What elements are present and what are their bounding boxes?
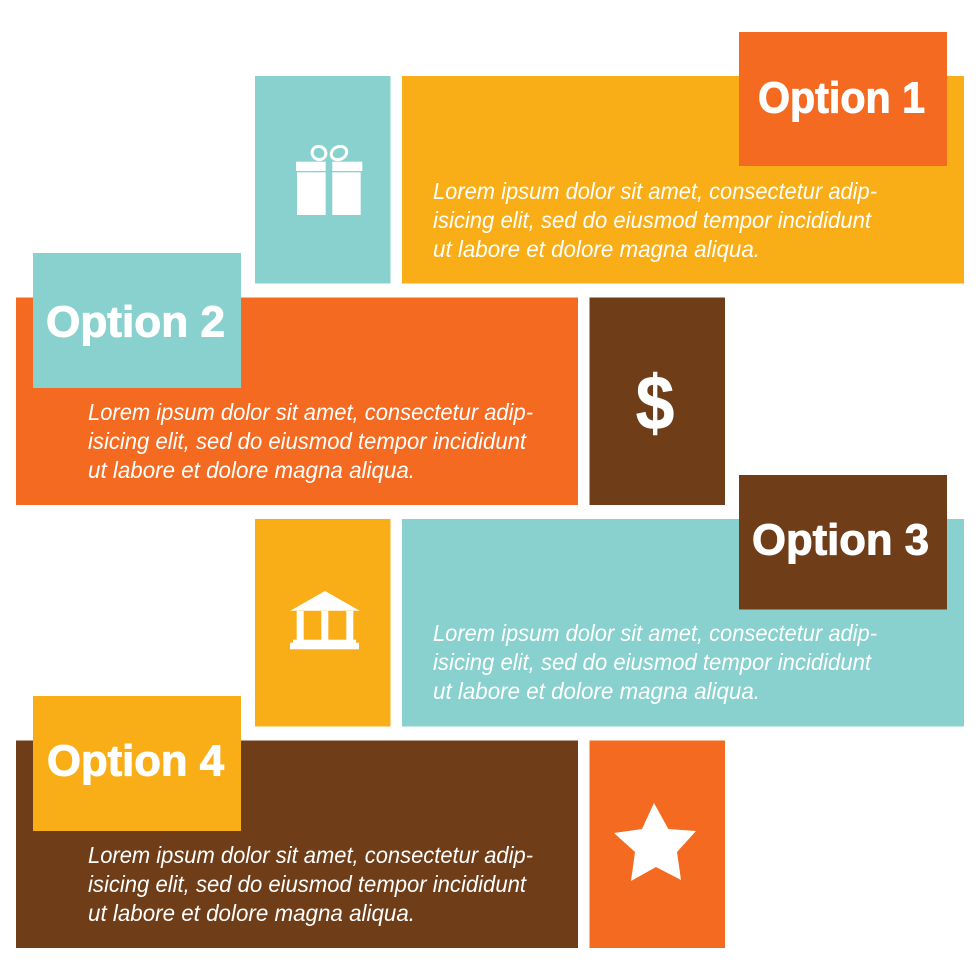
content bar: brown: [16, 740, 578, 948]
label box: Option 4: [33, 696, 241, 831]
icon: dollar sign: $: [636, 360, 674, 446]
icon: gift: [296, 144, 362, 215]
text block: option 4 description: isicing elit, sed do eiusmod tempor incididunt: [88, 871, 528, 897]
icon: star: [614, 803, 696, 881]
text block: option 2 description: isicing elit, sed do eiusmod tempor incididunt: [88, 428, 528, 454]
label box: Option 3: Option 3: [752, 516, 929, 564]
text block: option 2 description: ut labore et dolore magna aliqua.: [88, 457, 415, 483]
label box: Option 4: Option 4: [47, 736, 225, 786]
label box: Option 2: Option 2: [46, 298, 225, 346]
panel: option 2: [16, 253, 725, 505]
icon tile: brown: [590, 298, 725, 505]
text block: option 1 description: ut labore et dolore magna aliqua.: [433, 236, 760, 262]
panel: option 3: [255, 475, 964, 726]
text block: option 3 description: isicing elit, sed do eiusmod tempor incididunt: [433, 649, 873, 675]
label box: Option 2: [33, 253, 241, 388]
content bar: yellow: [402, 76, 964, 284]
content bar: teal: [402, 519, 964, 726]
text block: option 3 description: ut labore et dolore magna aliqua.: [433, 678, 760, 704]
icon tile: yellow: [255, 519, 390, 726]
label box: Option 1: [739, 32, 947, 166]
panel: option 1: [255, 32, 964, 284]
text block: option 1 description: Lorem ipsum dolor sit amet, consectetur adip-: [433, 178, 877, 204]
text block: option 4 description: Lorem ipsum dolor sit amet, consectetur adip-: [88, 842, 533, 868]
label box: Option 3: [739, 475, 947, 610]
icon tile: teal: [255, 76, 390, 284]
panel: option 4: [16, 696, 725, 948]
icon tile: orange: [590, 740, 725, 948]
text block: option 3 description: Lorem ipsum dolor sit amet, consectetur adip-: [433, 620, 877, 646]
label box: Option 1: Option 1: [758, 74, 925, 122]
text block: option 1 description: isicing elit, sed do eiusmod tempor incididunt: [433, 207, 873, 233]
text block: option 2 description: Lorem ipsum dolor sit amet, consectetur adip-: [88, 399, 533, 425]
icon: bank building: [290, 591, 360, 649]
content bar: orange: [16, 298, 578, 505]
text block: option 4 description: ut labore et dolore magna aliqua.: [88, 900, 415, 926]
